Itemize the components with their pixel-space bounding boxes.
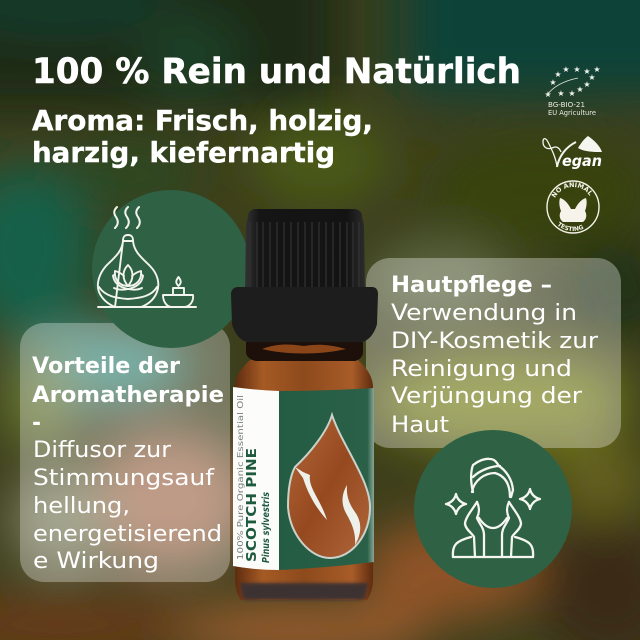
icon circle: skin care	[414, 430, 572, 588]
text block: skin care: Haut	[391, 413, 449, 438]
text block: aromatherapy benefits: Vorteile der	[32, 354, 180, 379]
bottle base shadow	[240, 583, 368, 600]
icon: no animal testing: NO ANIMAL	[551, 182, 592, 198]
text block: skin care: Reinigung und	[391, 357, 572, 382]
icon: EU organic leaf logo: ★	[583, 67, 591, 76]
text block: skin care: Verwendung in	[391, 301, 577, 326]
text block: aromatherapy benefits: energetisierend	[33, 522, 222, 547]
label text: 100% Pure Organic Essential Oil	[236, 395, 245, 560]
icon: EU organic leaf logo: ★	[588, 73, 596, 82]
icon: EU organic leaf logo: ★	[554, 70, 562, 79]
label text: Pinus sylvestris	[261, 492, 272, 563]
icon: EU organic leaf logo	[544, 65, 601, 117]
icon: diffuser with lotus and candle	[98, 207, 196, 307]
dropper cap ribbed top	[245, 209, 365, 290]
dropper cap collar	[231, 287, 378, 342]
text block: skin care: Verjüngung der	[391, 384, 583, 409]
icon: EU organic leaf logo: ★	[593, 65, 601, 74]
icon: woman with towel and sparkles	[446, 459, 540, 557]
text block: aromatherapy benefits: Diffusor zur	[33, 438, 172, 463]
icon: no animal testing: TESTING	[558, 222, 584, 231]
text block: skin care: Hautpflege –	[391, 273, 552, 298]
icon: EU organic leaf logo: ★	[544, 90, 552, 99]
text block: aromatherapy benefits: e Wirkung	[33, 549, 159, 574]
label drop emblem	[288, 415, 370, 558]
text: certification code: EU Agriculture	[548, 109, 596, 117]
icon: EU organic leaf logo: ★	[583, 80, 591, 89]
icon: EU organic leaf logo: ★	[549, 78, 557, 87]
text block: aromatherapy benefits: Aromatherapie	[32, 383, 224, 408]
text block: skin care	[391, 273, 599, 438]
icon: EU organic leaf logo: ★	[576, 85, 584, 94]
text block: aromatherapy benefits: Stimmungsauf	[33, 466, 215, 491]
icon: vegan mark: egan	[562, 152, 602, 170]
icon circle: diffuser	[92, 190, 250, 348]
label text	[236, 395, 272, 563]
bottle neck	[246, 342, 363, 361]
text: certification code: BG-BIO-21	[548, 101, 585, 109]
title: 100 % Rein und Natürlich	[32, 52, 521, 92]
bottle body	[235, 360, 373, 600]
icon: EU organic leaf logo: ★	[557, 89, 565, 98]
subtitle: aroma	[32, 104, 373, 169]
panel: skin care text panel	[366, 258, 621, 448]
text: certification code	[548, 101, 596, 117]
icon: EU organic leaf logo: ★	[568, 89, 576, 98]
text block: aromatherapy benefits: hellung,	[33, 494, 130, 519]
icon: vegan mark	[543, 136, 602, 170]
text block: aromatherapy benefits: -	[32, 411, 41, 436]
subtitle: aroma: harzig, kiefernartig	[32, 136, 335, 169]
bottle	[231, 209, 378, 600]
icon: EU organic leaf logo: ★	[573, 65, 581, 74]
icon: EU organic leaf logo: ★	[562, 65, 570, 74]
text block: aromatherapy benefits	[32, 354, 224, 574]
subtitle: aroma: Aroma: Frisch, holzig,	[32, 104, 373, 137]
label text: SCOTCH PINE	[244, 448, 260, 562]
bottle label	[233, 387, 374, 570]
panel: aromatherapy text panel	[20, 323, 230, 582]
text block: skin care: DIY-Kosmetik zur	[391, 329, 599, 354]
icon: no animal testing	[546, 180, 600, 234]
